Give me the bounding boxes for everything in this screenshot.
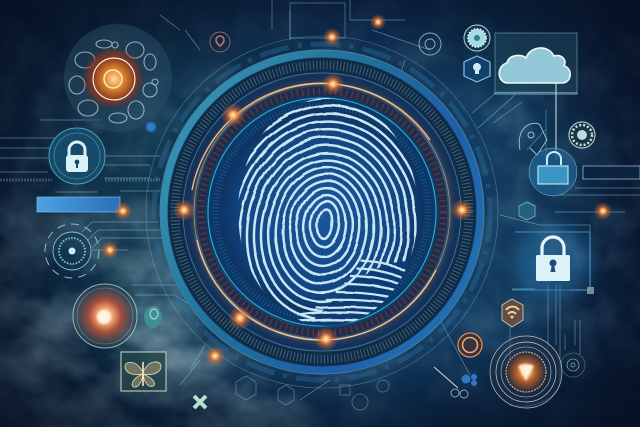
small data bar: [583, 166, 640, 179]
panel: biometric orb: [64, 24, 172, 132]
orb ornaments: [69, 40, 158, 123]
orange scanning ring: [192, 83, 450, 340]
icon: round gear: [569, 122, 595, 148]
icon: scissors and blue dots: [434, 367, 477, 398]
icon: small dial: [561, 353, 585, 377]
icon: teal pendant: [144, 306, 162, 328]
lower icons: [236, 376, 389, 410]
icon: circuit ornament: [519, 123, 547, 155]
icon: orange coin: [458, 333, 482, 357]
top small icons: [210, 3, 441, 55]
icon: hex lock: [464, 56, 490, 82]
hex badge: [519, 202, 535, 220]
icon: butterfly frame: [121, 352, 166, 391]
fingerprint: [238, 98, 417, 326]
blue lock frame: [512, 232, 594, 294]
outer scanner rings: [146, 36, 498, 388]
icon: sun gear: [464, 25, 490, 51]
icon: padlock in circle: [49, 128, 105, 184]
inner lens: [206, 96, 438, 328]
icon: digital padlock: [529, 148, 577, 196]
icon: circular tech dial: [45, 224, 99, 278]
icon: wifi hexagon: [502, 299, 523, 327]
icon: cloud: [499, 48, 570, 83]
panel: cloud: [494, 33, 578, 150]
glow points: [101, 14, 612, 366]
icon: crossed tool: [194, 396, 206, 408]
icon: glowing red sensor: [73, 284, 137, 348]
icon: heart target: [490, 336, 562, 408]
icon: white padlock: [515, 224, 591, 300]
blue progress bar: [37, 197, 120, 212]
lower delta ridges: [298, 259, 410, 326]
